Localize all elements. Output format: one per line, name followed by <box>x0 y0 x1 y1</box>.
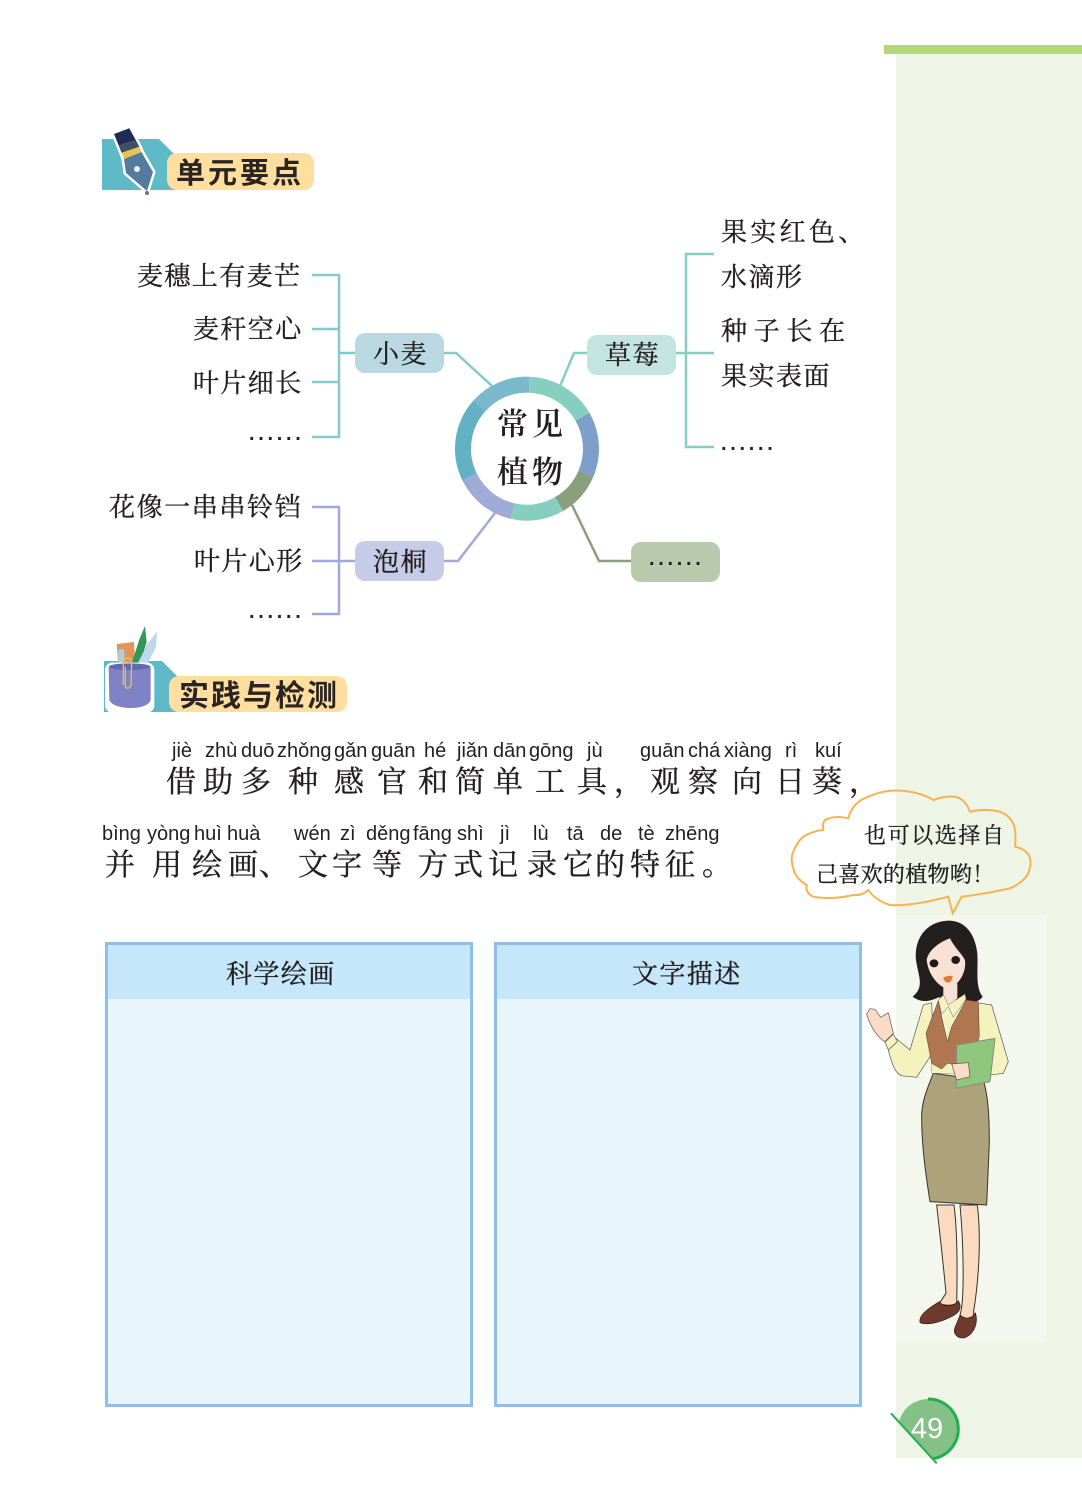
panel: written description <box>496 944 860 1406</box>
heading: 单元要点: 单元要点 <box>176 157 304 190</box>
illustration: teacher <box>867 921 1008 1338</box>
pinyin line 2: tā <box>567 823 585 845</box>
branch: other plants <box>572 505 720 582</box>
text block: task with pinyin <box>102 740 879 882</box>
panel: scientific drawing <box>106 944 472 1406</box>
pinyin line 2: yòng <box>147 823 190 845</box>
pinyin line 1: gōng <box>529 740 574 762</box>
pinyin line 1: guān <box>371 740 416 762</box>
pinyin line 2: zì <box>340 823 356 845</box>
page number: 49 <box>891 1399 958 1463</box>
pinyin line 2: bìng <box>102 823 141 845</box>
hanzi line 2: 并用绘画、文字等方式记录它的特征。 <box>105 849 732 882</box>
branch: wheat: 叶片细长 <box>193 369 303 398</box>
branch: paulownia: ...... <box>249 601 305 623</box>
mind map: common plants <box>109 218 868 623</box>
pinyin line 2: huà <box>227 823 261 845</box>
panel: written description: 文字描述 <box>632 960 742 989</box>
icon: pencil cup <box>105 626 157 713</box>
heading: 实践与检测 <box>104 626 347 713</box>
side panel: pale green margin <box>884 45 1082 1458</box>
branch: strawberry: 水滴形 <box>721 263 804 292</box>
pinyin line 1: rì <box>785 740 797 762</box>
pinyin line 1: xiàng <box>724 740 772 762</box>
teacher upper body <box>867 921 1008 1205</box>
pinyin line 1: chá <box>688 740 721 762</box>
teacher legs <box>920 1205 979 1338</box>
speech bubble: 己喜欢的植物哟！ <box>816 862 994 887</box>
pinyin line 1: hé <box>424 740 446 762</box>
central ring: 常见植物: 常见 <box>497 407 567 442</box>
branch: paulownia: 花像一串串铃铛 <box>109 493 302 522</box>
pinyin line 2 <box>102 823 720 845</box>
pinyin line 1: jù <box>586 740 603 762</box>
branch: strawberry <box>560 218 868 455</box>
central ring: 常见植物: 植物 <box>497 455 567 490</box>
pinyin line 2: fāng <box>413 823 452 845</box>
pinyin line 2: tè <box>638 823 655 845</box>
pinyin line 2: lù <box>533 823 549 845</box>
pinyin line 1: duō <box>241 740 274 762</box>
branch: paulownia: 叶片心形 <box>194 547 304 576</box>
branch: other plants: ...... <box>649 548 705 570</box>
icon: fountain pen <box>114 128 153 195</box>
pinyin line 1: zhù <box>205 740 237 762</box>
branch: strawberry: 草莓 <box>605 341 660 370</box>
branch: wheat: 麦秆空心 <box>193 315 303 344</box>
central ring: 常见植物 <box>463 385 591 513</box>
pinyin line 1: kuí <box>815 740 842 762</box>
pinyin line 2: de <box>600 823 622 845</box>
heading: 实践与检测: 实践与检测 <box>179 680 339 713</box>
pinyin line 1: jiǎn <box>456 740 488 762</box>
branch: wheat <box>137 262 492 445</box>
pinyin line 1: jiè <box>171 740 192 762</box>
pinyin line 1: guān <box>640 740 684 762</box>
page number: 49: 49 <box>911 1413 943 1445</box>
pinyin line 1: gǎn <box>334 740 367 762</box>
branch: wheat: 麦穗上有麦芒 <box>137 262 301 291</box>
pinyin line 2: děng <box>366 823 410 845</box>
branch: strawberry: 果实表面 <box>721 362 831 391</box>
panel: scientific drawing: 科学绘画 <box>226 960 336 989</box>
branch: strawberry: ...... <box>721 433 777 455</box>
pinyin line 1 <box>171 740 842 762</box>
branch: strawberry: 果实红色、 <box>721 218 868 247</box>
branch: strawberry: 种子长在 <box>721 317 852 346</box>
branch: wheat: 小麦 <box>373 340 428 369</box>
pinyin line 1: dān <box>493 740 526 762</box>
pinyin line 2: jì <box>499 823 510 845</box>
pinyin line 2: zhēng <box>665 823 720 845</box>
heading: 单元要点 <box>102 128 314 195</box>
pinyin line 1: zhǒng <box>277 740 332 762</box>
branch: paulownia: 泡桐 <box>373 548 428 577</box>
branch: paulownia <box>109 493 495 623</box>
speech bubble: 也可以选择自 <box>864 823 1006 848</box>
branch: wheat: ...... <box>249 423 305 445</box>
pinyin line 2: wén <box>293 823 331 845</box>
speech bubble <box>792 791 1030 913</box>
pinyin line 2: shì <box>457 823 484 845</box>
hanzi line 1: 借助多种感官和简单工具，观察向日葵， <box>166 766 879 799</box>
pinyin line 2: huì <box>194 823 222 845</box>
